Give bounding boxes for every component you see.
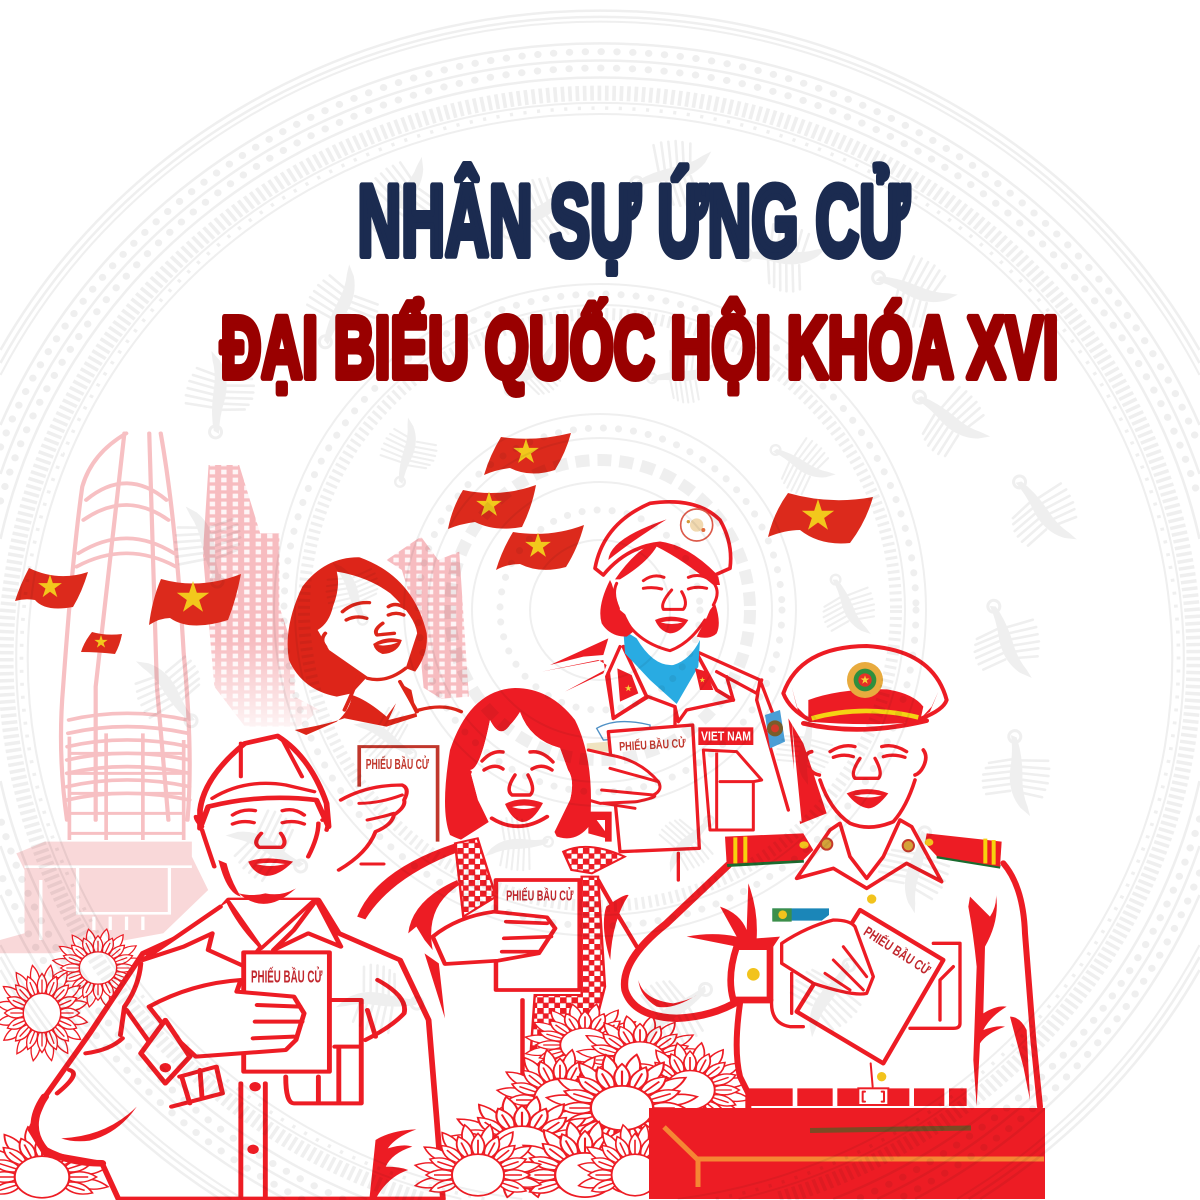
- flag 6: [496, 525, 584, 570]
- flag 1: [15, 568, 88, 608]
- skyline: pale pink towers: [0, 433, 469, 953]
- figure: woman looking up, holding ballot: [288, 557, 461, 870]
- title: [220, 164, 1058, 396]
- ballot: [244, 952, 329, 1072]
- hair: [445, 688, 591, 842]
- hand: [782, 920, 873, 994]
- flag 3: [149, 574, 241, 626]
- ballot and hand: PHIẾU BẦU CỬ: [366, 756, 429, 773]
- flag 7: [768, 493, 873, 543]
- hair: [600, 580, 719, 638]
- ballot label: PHIẾU BẦU CỬ: [506, 887, 574, 904]
- figure: woman soldier, peacekeeper: [542, 502, 827, 880]
- figure: woman in checkered scarf: [357, 688, 641, 1120]
- tower: base podium: [0, 733, 208, 953]
- beret badge: [681, 509, 713, 541]
- arm and hand: [149, 980, 304, 1057]
- building: middle tower: [203, 465, 325, 727]
- cuff: [141, 1020, 190, 1083]
- face: [202, 792, 322, 902]
- belt buckle: [858, 1088, 888, 1105]
- ballot box: [649, 1108, 1045, 1199]
- sleeve badge: [765, 710, 785, 748]
- ballot: [496, 880, 580, 990]
- belt: [747, 1088, 967, 1106]
- hard hat: [200, 736, 329, 828]
- VIET NAM tag: VIET NAM: [701, 730, 751, 744]
- ballot: [608, 725, 699, 852]
- flowers: left edge: [0, 928, 144, 1198]
- shirt collar: [797, 820, 942, 888]
- cap badge: [847, 662, 883, 698]
- body: [620, 820, 1040, 1108]
- head and hair: [288, 557, 461, 735]
- cuff: [731, 947, 770, 1000]
- blouse and arm: [388, 817, 641, 1120]
- flag 5: [448, 485, 536, 529]
- beret: [615, 542, 720, 585]
- ballot label: PHIẾU BẦU CỬ: [619, 735, 687, 754]
- epaulette right: [925, 833, 1002, 869]
- flag 4: [484, 433, 571, 475]
- pockets and placket: [171, 1000, 361, 1199]
- flag 2: [81, 632, 122, 654]
- epaulette left: [725, 833, 813, 867]
- box edge lines: [664, 1127, 1044, 1187]
- name tag: [587, 722, 650, 752]
- collar: [143, 900, 341, 967]
- VIET NAM tag: [698, 727, 753, 745]
- figure: police officer dropping ballot: [620, 646, 1040, 1108]
- head and cap: [783, 646, 947, 827]
- face: [466, 712, 578, 845]
- cap crown: [783, 646, 947, 720]
- face: [615, 547, 717, 648]
- hand: [588, 750, 660, 803]
- tower: main skyscraper: [61, 433, 190, 820]
- ballot slot: [810, 1128, 971, 1130]
- red backing shape: [788, 718, 827, 824]
- building: right tower: [387, 537, 469, 700]
- pocket: [703, 750, 762, 830]
- collar insignia: [617, 668, 713, 702]
- pockets: [772, 943, 960, 1028]
- ballot and hand: [339, 747, 439, 870]
- ballot label: PHIẾU BẦU CỬ: [861, 922, 934, 978]
- figure: construction worker: PHIẾU BẦU CỬ: [251, 965, 323, 987]
- figure: construction worker: [31, 736, 443, 1199]
- shirt body: [31, 900, 443, 1199]
- blue scarf: [623, 630, 700, 704]
- name badge: [772, 908, 829, 922]
- uniform: [543, 640, 797, 857]
- scarf: [455, 838, 496, 917]
- flowers: central cluster: [414, 1003, 751, 1198]
- flags: [15, 433, 873, 654]
- ballot: [797, 910, 943, 1063]
- hand: [433, 912, 555, 964]
